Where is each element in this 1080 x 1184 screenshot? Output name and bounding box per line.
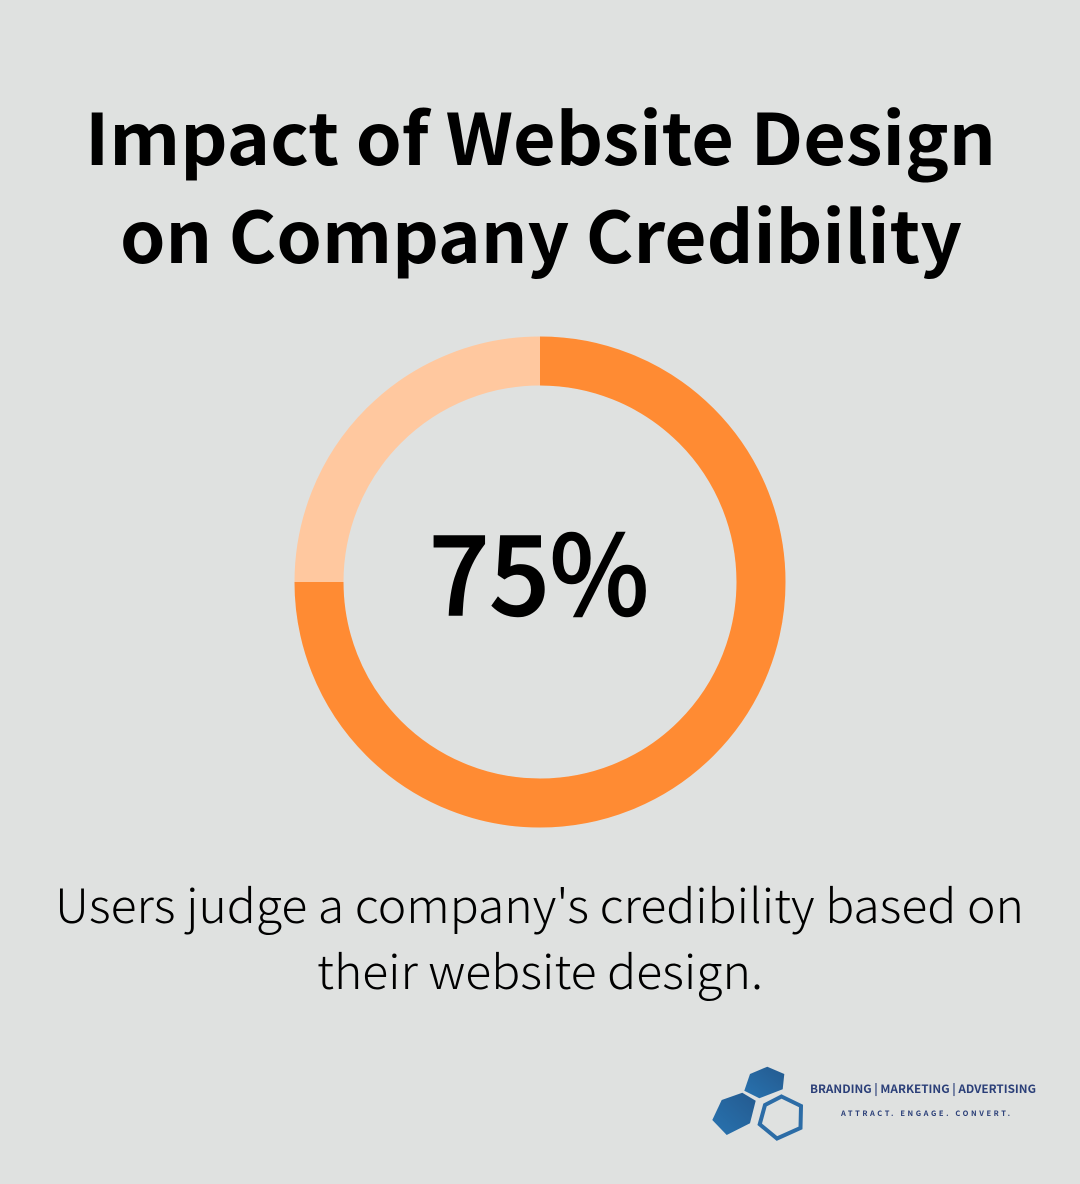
logo tagline: BRANDING | MARKETING | ADVERTISING xyxy=(810,1081,1036,1097)
logo xyxy=(712,1067,1036,1138)
logo tagline xyxy=(810,1081,1036,1119)
donut chart: 75% xyxy=(319,361,761,803)
description text: their website design. xyxy=(317,934,763,1003)
title: on Company Credibility xyxy=(120,182,962,284)
title: Impact of Website Design xyxy=(85,84,996,186)
donut value: 75% xyxy=(429,487,649,647)
description text xyxy=(55,868,1024,1003)
title xyxy=(85,84,996,284)
icon: hexagons xyxy=(712,1067,801,1138)
logo tagline: ATTRACT. ENGAGE. CONVERT. xyxy=(840,1108,1010,1119)
description text: Users judge a company's credibility based on xyxy=(55,868,1024,937)
